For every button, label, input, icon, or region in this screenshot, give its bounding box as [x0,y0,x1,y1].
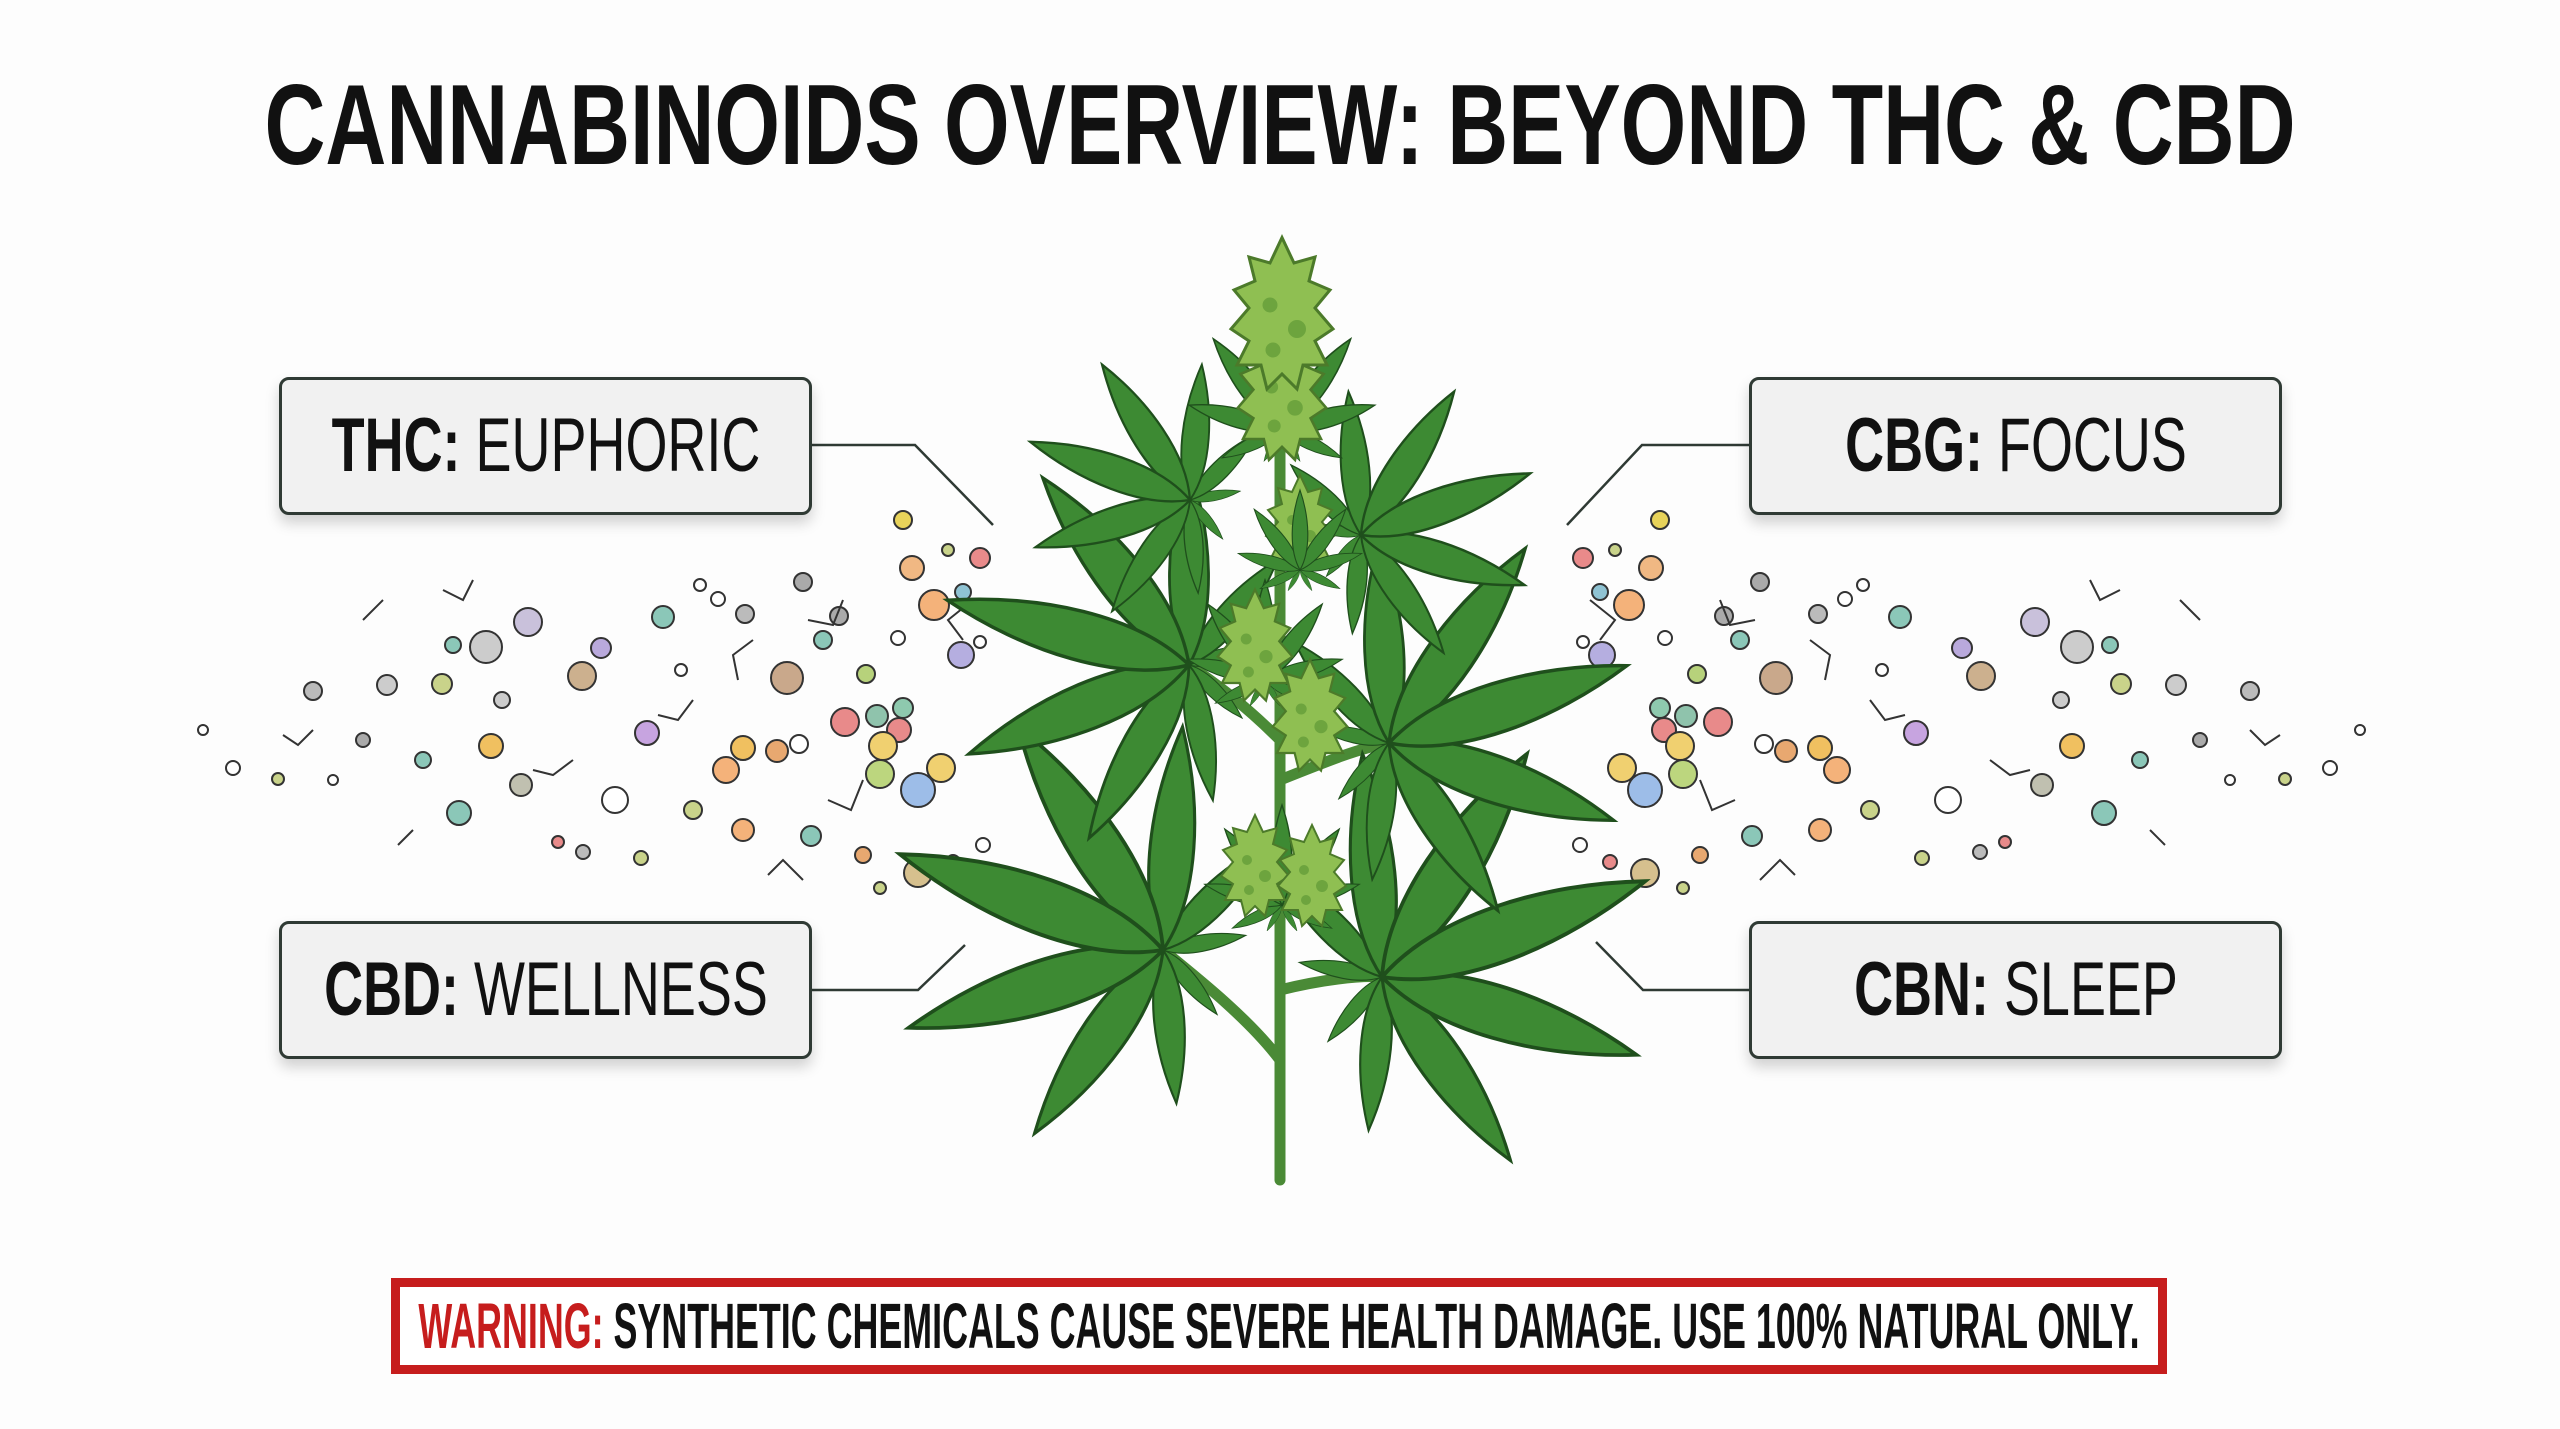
lower leaves [824,646,1313,1186]
warning banner: WARNING: SYNTHETIC CHEMICALS CAUSE SEVERE HEALTH DAMAGE. USE 100% NATURAL ONLY. [418,1290,2140,1362]
label: CBG [1749,377,2282,515]
stem and branches [1163,400,1389,1180]
label: CBN: CBN: SLEEP [1854,947,2177,1032]
connectors [812,445,1749,990]
molecules: left cloud [198,511,990,894]
label: CBN [1749,921,2282,1059]
plant [824,238,1721,1213]
label: THC [279,377,812,515]
label: CBD: CBD: WELLNESS [324,947,767,1032]
label: THC: THC: EUPHORIC [331,403,760,488]
label: CBD [279,921,812,1059]
upper leaves [984,315,1281,643]
title: CANNABINOIDS OVERVIEW: BEYOND THC & CBD [264,62,2296,189]
buds [1203,805,1361,933]
mid leaves [896,409,1308,875]
label: CBG: CBG: FOCUS [1845,403,2186,488]
molecules: right cloud [1573,511,2365,894]
